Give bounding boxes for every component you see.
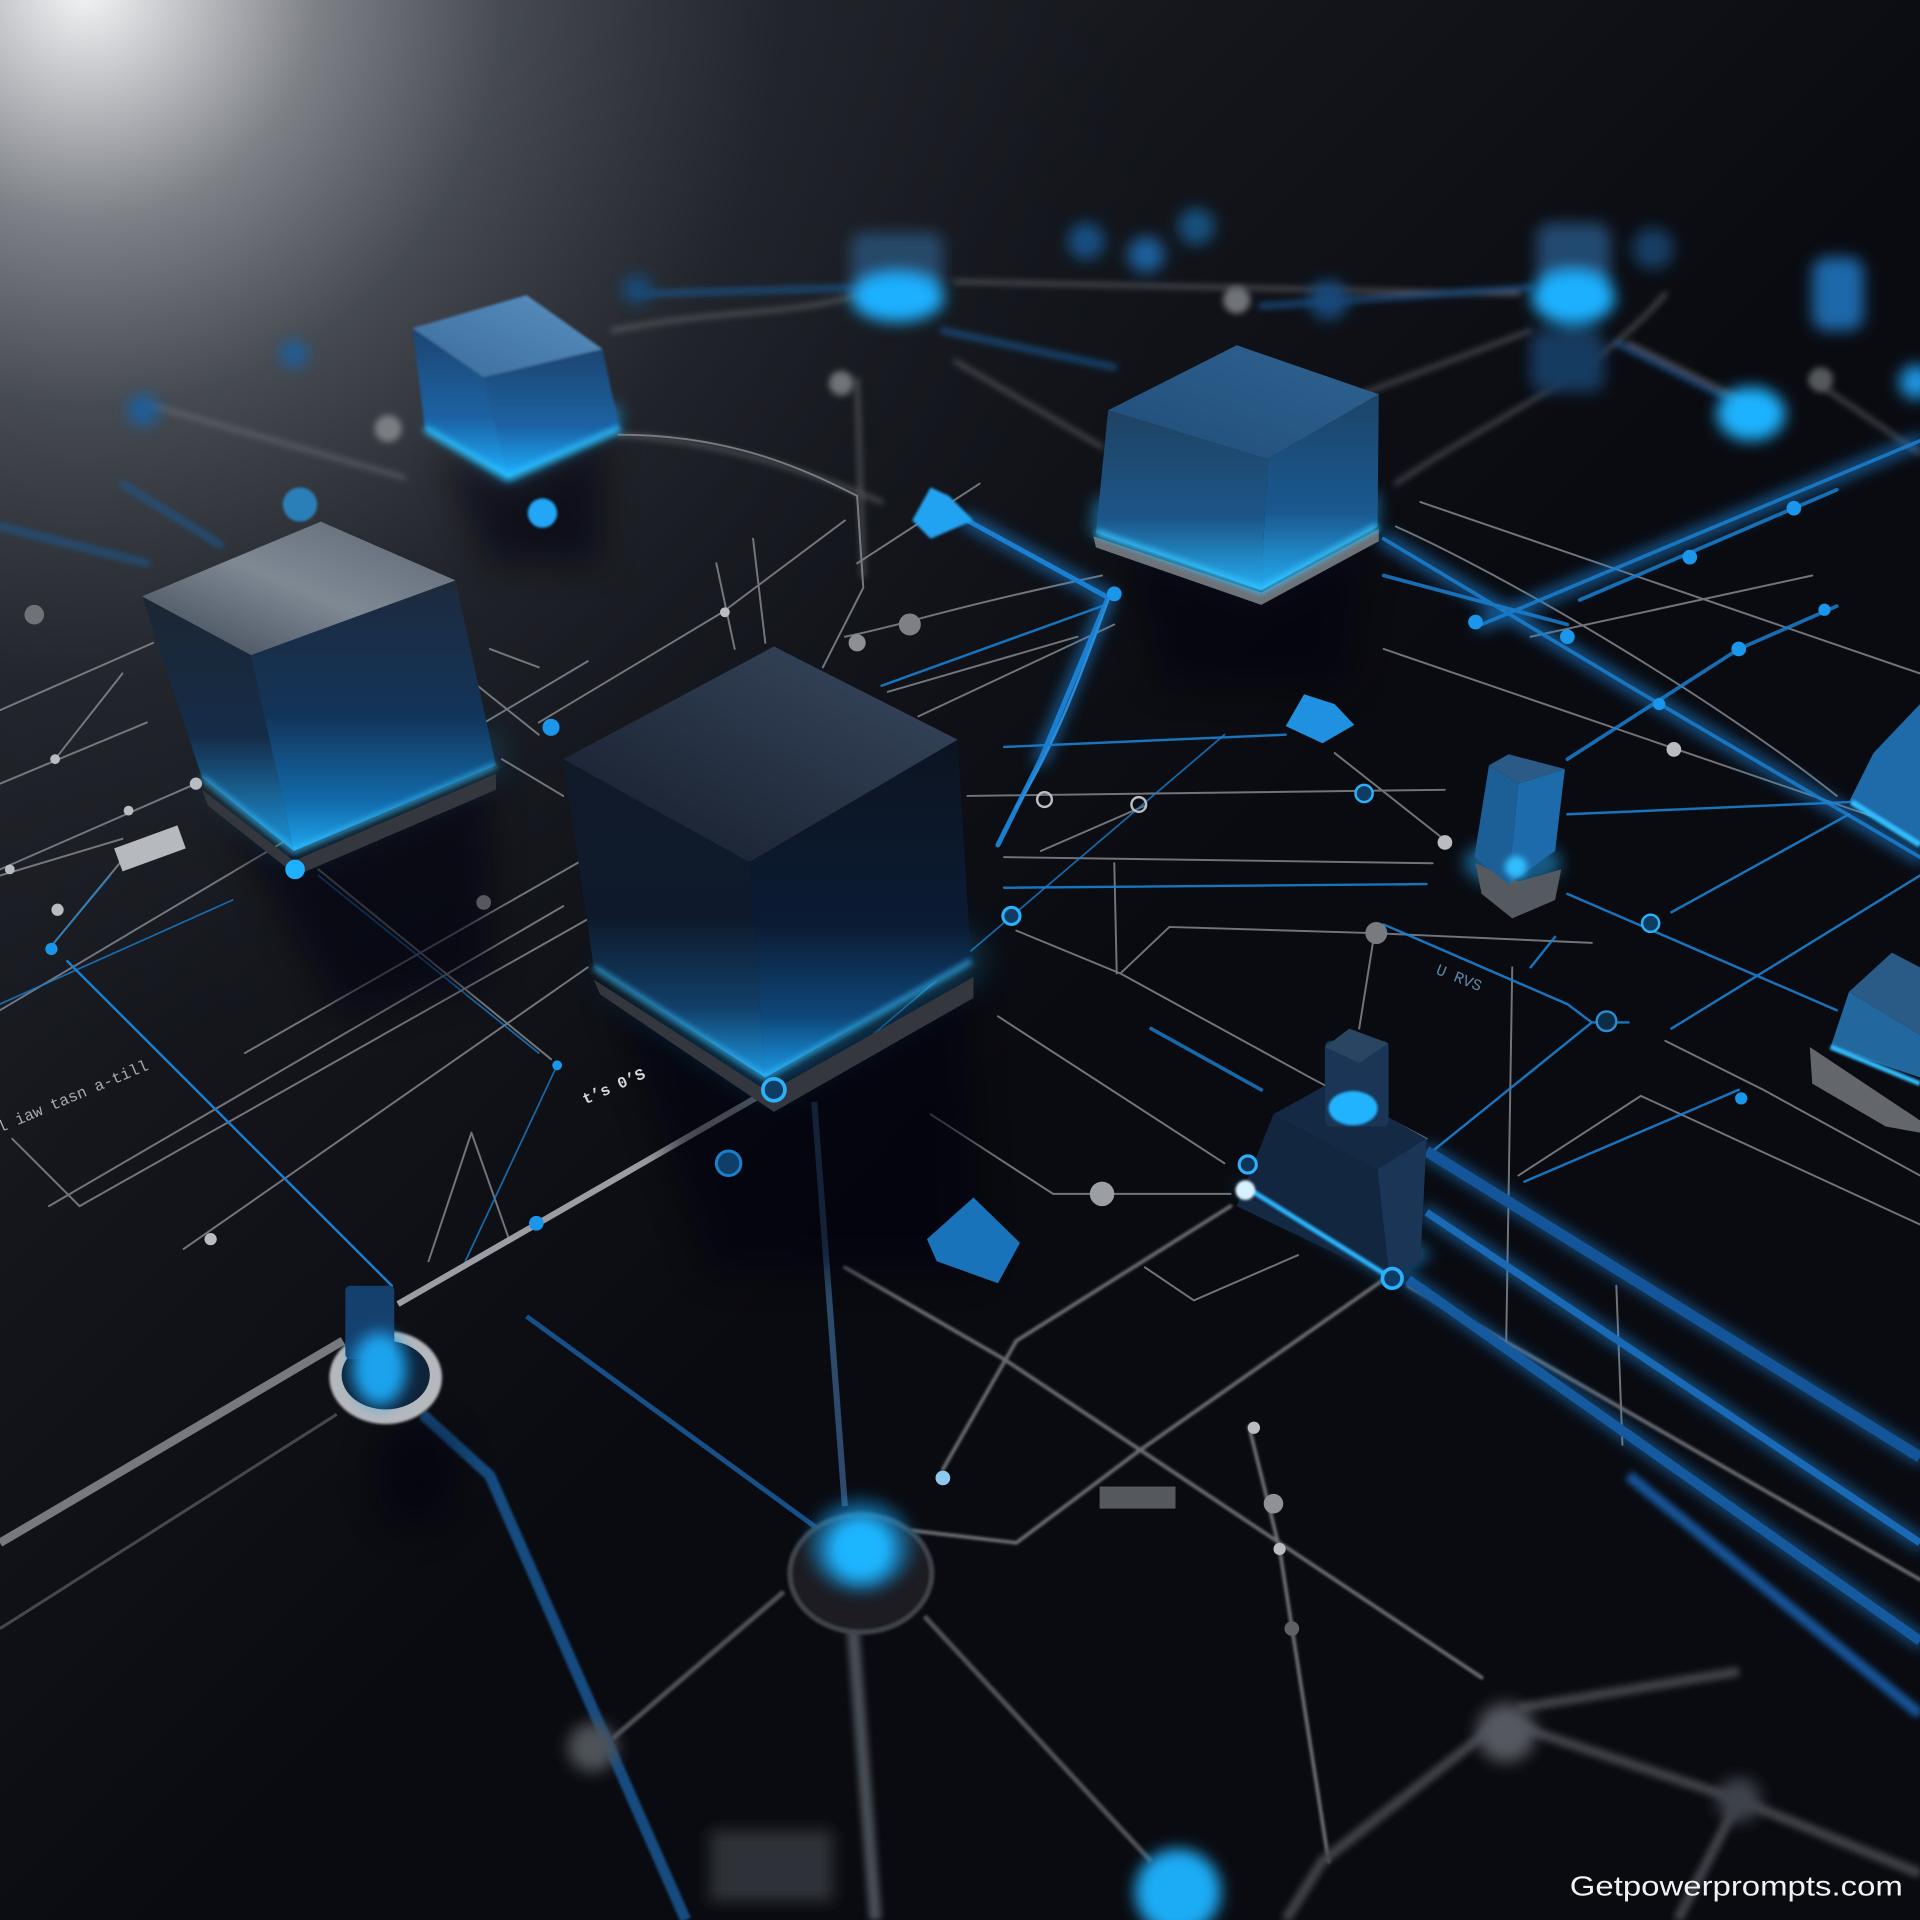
network lines: heavier foreground board traces [845,1206,1920,1861]
board micro labels: t’s 0’S [580,1065,649,1109]
cube: left [142,522,496,876]
cube shadows on surface [227,441,1365,1531]
block: right mid pillar [1463,754,1565,918]
glow under blue traces [967,441,1920,1641]
node: bottom centre glowing hub [790,1499,932,1632]
small grey nodes [5,287,1833,1636]
network lines: grey mid-ground traces [0,435,1920,1445]
block: far right edge lower [1810,953,1920,1133]
cube: back left [413,295,620,480]
block: far right edge upper [1849,704,1920,845]
small blue nodes [45,487,1831,1485]
network lines: thick blue foreground traces [422,1102,1920,1920]
board micro labels: U RVS [1433,961,1484,996]
cube: back right [1090,345,1379,605]
network lines: far blurred background traces [0,282,1920,576]
node: left foreground glowing post [329,1286,442,1424]
watermark: Getpowerprompts.com [1570,1871,1903,1902]
network lines: blue traces [0,441,1920,1286]
board micro labels [0,961,1484,1137]
network lines: thick grey foreground traces [0,1096,1920,1920]
cube: main centre [563,647,980,1112]
block: foreground right with pillar [1231,1029,1433,1288]
